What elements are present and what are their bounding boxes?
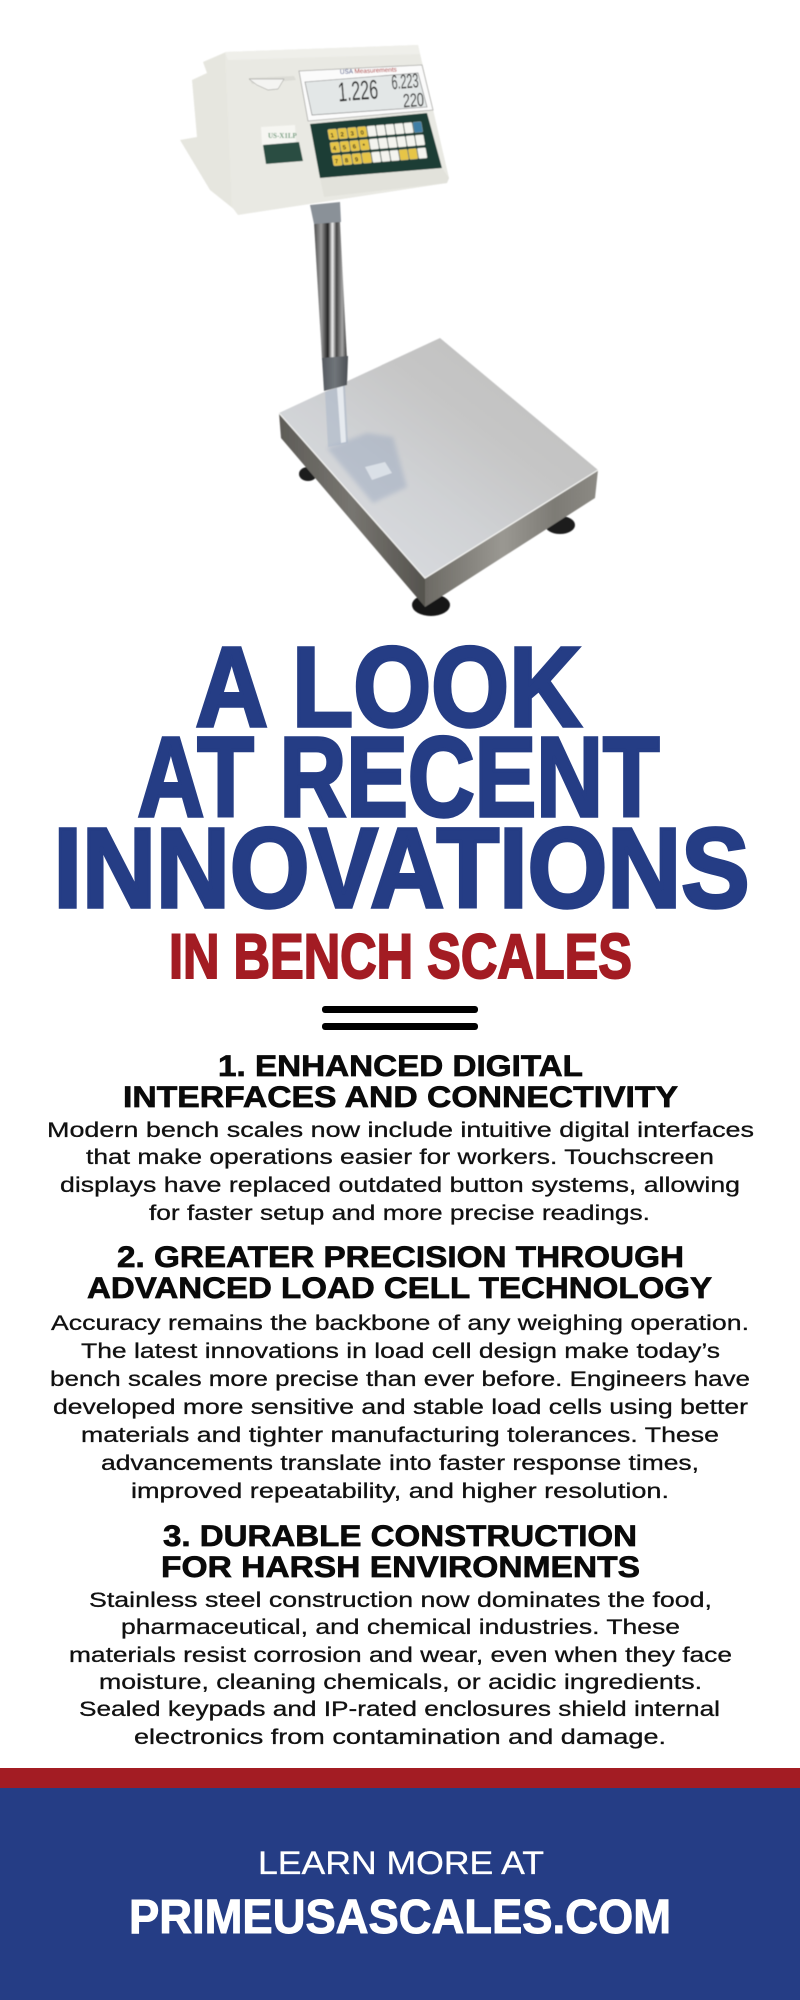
section 2: load cell technology <box>50 1241 750 1503</box>
section 3 body: electronics from contamination and damage. <box>134 1725 666 1749</box>
indicator rear housing <box>180 52 240 214</box>
section 1 body <box>47 1118 754 1225</box>
section 3 body: Stainless steel construction now dominates the food, <box>89 1588 712 1612</box>
scale foot: front <box>412 594 450 616</box>
section 3 body <box>69 1588 732 1749</box>
title: A Look at Recent Innovations: INNOVATIONS <box>54 805 750 931</box>
keypad keys: 6 <box>352 144 357 151</box>
keypad keys: 1 <box>330 133 335 139</box>
title: A Look at Recent Innovations <box>54 624 750 931</box>
platform side: left <box>279 413 425 607</box>
platform edge highlight <box>279 413 598 578</box>
keypad keys: * <box>362 144 366 150</box>
section 3 body: moisture, cleaning chemicals, or acidic ingredients. <box>99 1670 702 1694</box>
indicator lower key flaps <box>320 168 449 197</box>
footer red band <box>0 1768 800 1788</box>
keypad keys: 4 <box>332 146 337 152</box>
platform reflection <box>325 385 407 503</box>
section 2 heading <box>87 1241 712 1305</box>
LCD screen <box>305 73 427 115</box>
section 3 body: pharmaceutical, and chemical industries. These <box>121 1615 680 1639</box>
keypad keys <box>328 122 427 166</box>
model label: US-X1LP <box>268 132 298 140</box>
keypad keys: 3 <box>350 131 355 138</box>
section 2 body: developed more sensitive and stable load cells using better <box>53 1395 748 1419</box>
keypad keys: 5 <box>342 145 347 151</box>
indicator body <box>225 45 449 215</box>
printer slot with paper <box>249 76 296 90</box>
platform top <box>279 338 598 578</box>
section 3 heading: FOR HARSH ENVIRONMENTS <box>161 1551 640 1584</box>
section 1 body: that make operations easier for workers. Touchscreen <box>86 1145 714 1169</box>
column lower collar <box>322 356 348 391</box>
model window <box>263 142 303 164</box>
indicator top edge <box>225 45 420 60</box>
platform side: right <box>425 470 598 607</box>
LCD readings: 6.223 <box>391 70 419 94</box>
section 3 heading <box>161 1520 640 1584</box>
keypad keys: 2 <box>340 132 345 138</box>
LCD readings <box>337 70 425 117</box>
section 2 body: advancements translate into faster response times, <box>101 1451 699 1475</box>
section 1 heading <box>123 1050 678 1114</box>
section 2 body: bench scales more precise than ever before. Engineers have <box>50 1367 750 1391</box>
footer panel <box>0 1788 800 2000</box>
section 2 body <box>50 1311 750 1503</box>
section 2 body: improved repeatability, and higher resolution. <box>131 1479 669 1503</box>
column <box>314 222 347 360</box>
section 2 heading: 2. GREATER PRECISION THROUGH <box>117 1241 684 1274</box>
keypad keys: 7 <box>335 159 340 165</box>
keypad keys: 8 <box>345 158 350 164</box>
keypad panel <box>310 113 442 178</box>
title: A Look at Recent Innovations: AT RECENT <box>138 714 660 840</box>
subtitle: In Bench Scales: IN BENCH SCALES <box>169 922 632 992</box>
column upper collar <box>310 202 341 224</box>
section 2 heading: ADVANCED LOAD CELL TECHNOLOGY <box>87 1272 712 1305</box>
section 1 heading: INTERFACES AND CONNECTIVITY <box>123 1081 678 1114</box>
section 1 body: displays have replaced outdated button systems, allowing <box>60 1173 740 1197</box>
brand text: USA Measurements <box>340 67 397 76</box>
footer call to action: LEARN MORE AT <box>258 1845 544 1881</box>
section 1 body: for faster setup and more precise readings. <box>149 1201 650 1225</box>
scale foot: right <box>545 516 575 534</box>
illustration: bench scale <box>180 45 598 616</box>
section 3 body: materials resist corrosion and wear, even when they face <box>69 1643 732 1667</box>
scale foot: rear left <box>299 467 317 481</box>
section 1 heading: 1. ENHANCED DIGITAL <box>218 1050 583 1083</box>
LCD readings: 220 <box>402 90 425 112</box>
footer website: PRIMEUSASCALES.COM <box>129 1891 671 1944</box>
section 2 body: The latest innovations in load cell design make today’s <box>81 1339 720 1363</box>
section 3: durable construction <box>69 1520 732 1749</box>
section 3 body: Sealed keypads and IP-rated enclosures shield internal <box>79 1697 720 1721</box>
keypad keys: 9 <box>355 157 360 164</box>
section 1 body: Modern bench scales now include intuitive digital interfaces <box>47 1118 754 1142</box>
title: A Look at Recent Innovations: A LOOK <box>196 624 582 750</box>
model label <box>261 125 298 145</box>
section 1: enhanced digital interfaces <box>47 1050 754 1225</box>
section 2 body: Accuracy remains the backbone of any weighing operation. <box>51 1311 749 1335</box>
keypad keys: 0 <box>360 130 365 137</box>
display frame <box>299 65 433 121</box>
LCD readings: 1.226 <box>337 74 379 107</box>
section 3 heading: 3. DURABLE CONSTRUCTION <box>163 1520 637 1553</box>
section 2 body: materials and tighter manufacturing tolerances. These <box>81 1423 719 1447</box>
